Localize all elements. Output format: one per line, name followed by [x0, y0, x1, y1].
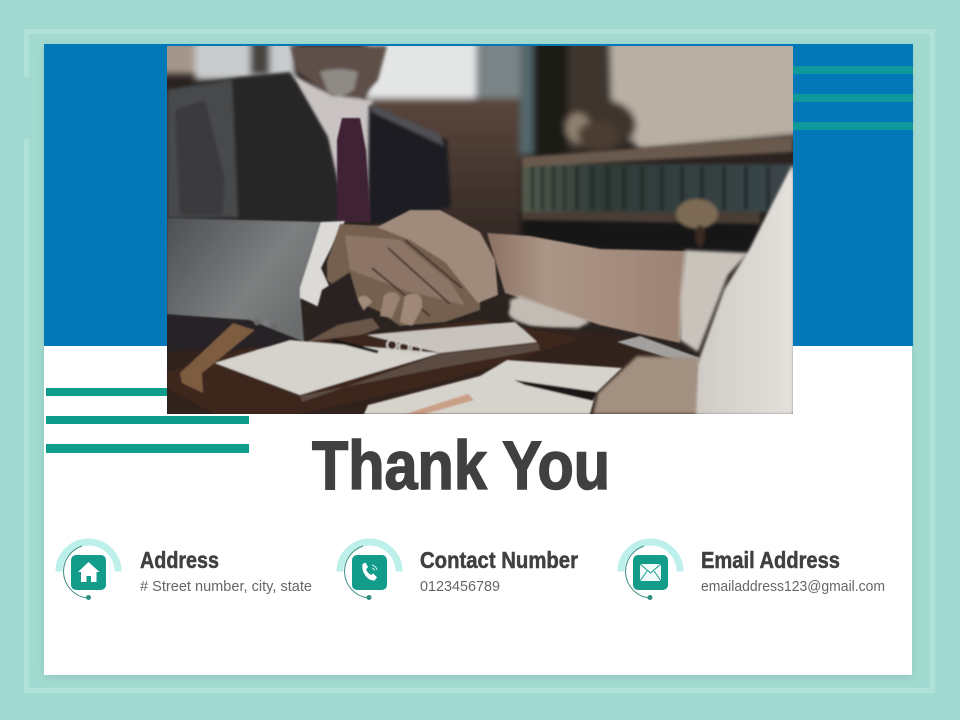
contact: phone [340, 542, 578, 600]
bookshelf [522, 137, 793, 247]
title: Thank You [312, 427, 610, 504]
plate rim redrawn [510, 296, 590, 328]
shaking hands [307, 210, 498, 346]
woman's hand holding pen [593, 356, 698, 414]
man's sleeve [167, 218, 345, 352]
woman's arm [487, 233, 686, 343]
photo background [160, 40, 800, 258]
necktie [337, 118, 371, 222]
photo: business handshake [160, 40, 800, 414]
table [170, 324, 624, 412]
phone [617, 336, 700, 367]
text: email: emailaddress123@gmail.com [701, 579, 885, 595]
white slide panel [44, 44, 912, 677]
contact: email [621, 542, 885, 600]
open notebook and pen [364, 360, 622, 414]
right green stripes [793, 66, 913, 130]
heading: address: Address [140, 547, 219, 573]
leather organizer [167, 320, 580, 414]
text: street: # Street number, city, state [140, 579, 312, 595]
woman's sleeve and blouse [680, 165, 793, 414]
plate [509, 299, 595, 327]
left green stripes [46, 388, 249, 453]
vase on shelf [565, 112, 618, 149]
icon: phone [340, 542, 399, 600]
icon: house [59, 542, 118, 600]
heading: email address: Email Address [701, 547, 840, 573]
man's jacket [167, 72, 451, 224]
heading: contact number: Contact Number [420, 547, 578, 573]
shirt cuff [300, 221, 345, 319]
contact: address [59, 542, 312, 600]
icon: envelope [621, 542, 680, 600]
text: phone number: 0123456789 [420, 579, 500, 595]
blue header band [44, 44, 913, 346]
man's head and shirt [290, 46, 387, 210]
